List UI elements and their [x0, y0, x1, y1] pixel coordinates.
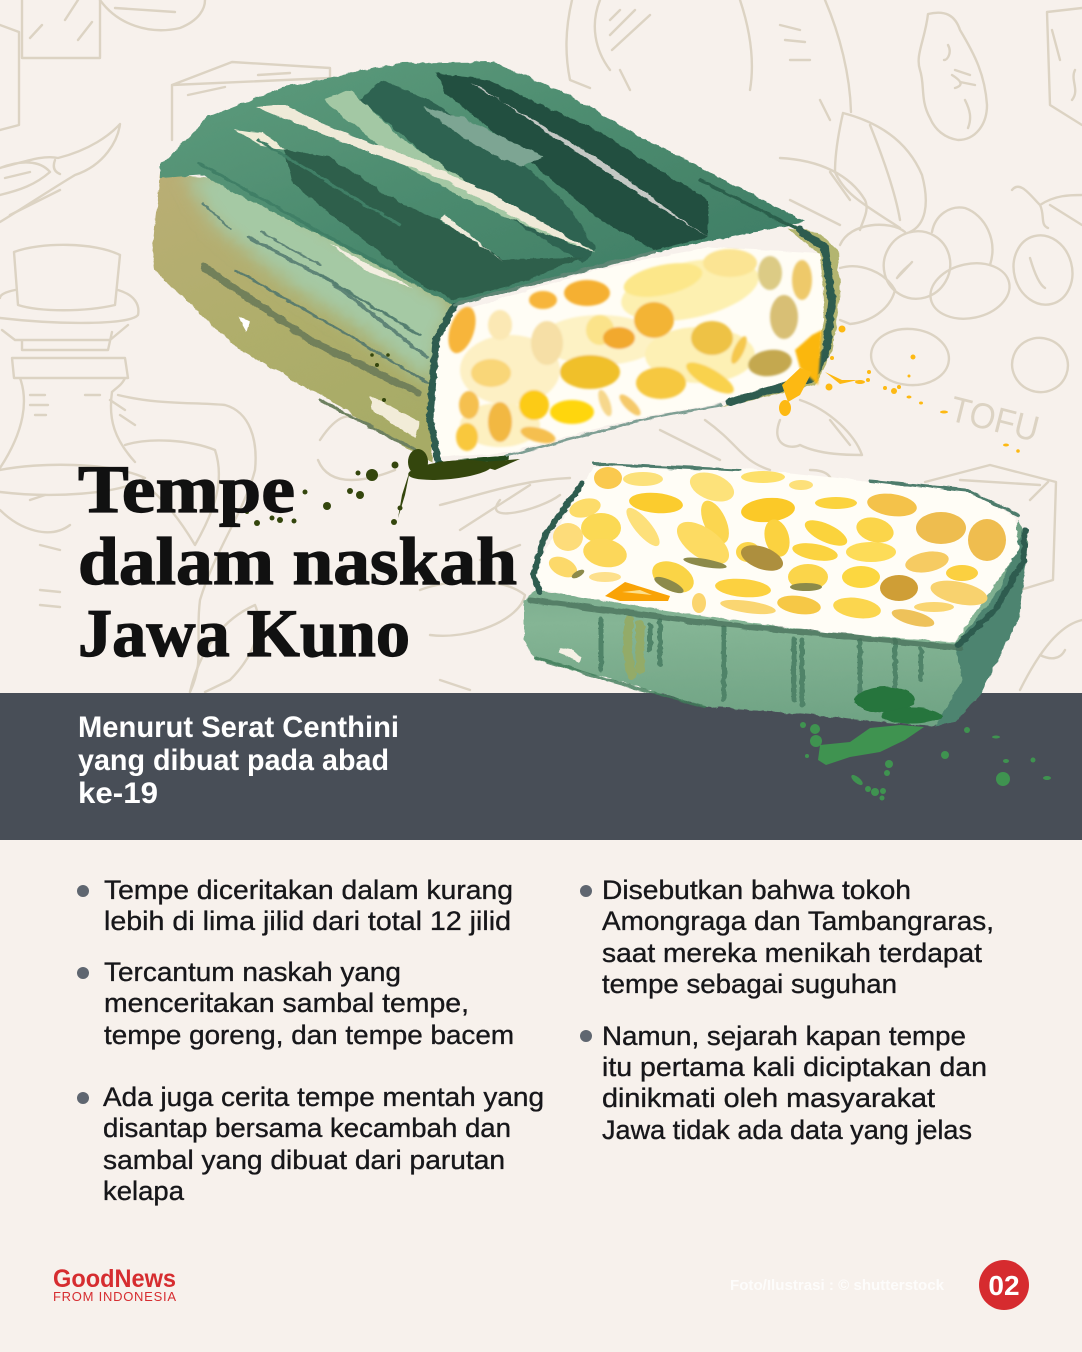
- label: TOFU: TOFU: [946, 388, 1043, 450]
- sketch: soybeans and leaves: [780, 113, 1082, 400]
- bullet 2: menceritakan sambal tempe,: [104, 988, 469, 1018]
- subtitle: [78, 711, 399, 810]
- title: Tempe: [78, 451, 295, 527]
- bullet 5: Jawa tidak ada data yang jelas: [602, 1115, 972, 1145]
- bullet 3: kelapa: [103, 1176, 185, 1206]
- dark green drip: [855, 687, 942, 724]
- cut face rim: [430, 230, 832, 464]
- leaf highlights and strokes: [199, 83, 800, 450]
- title: dalam naskah: [78, 523, 517, 599]
- subtitle: Menurut Serat Centhini: [78, 711, 399, 744]
- logo: GoodNews from Indonesia: GoodNews: [53, 1265, 176, 1293]
- title: Jawa Kuno: [78, 595, 410, 671]
- bullet 5: dinikmati oleh masyarakat: [602, 1083, 936, 1113]
- sketch: tofu block far right: [1047, 8, 1082, 125]
- sketch: oil jar with cork: [0, 245, 258, 692]
- logo: GoodNews from Indonesia: FROM INDONESIA: [53, 1289, 176, 1304]
- olive right rim: [720, 228, 840, 408]
- sketch: hand and beans lower centre: [318, 416, 720, 690]
- leaf side: [152, 62, 806, 463]
- bullet 4: [580, 875, 994, 999]
- dark green splatter: [245, 353, 520, 526]
- cut face: [433, 247, 824, 457]
- bullet 3: sambal yang dibuat dari parutan: [103, 1145, 505, 1175]
- sketch: nut top right: [919, 13, 987, 140]
- subtitle: ke-19: [78, 777, 158, 810]
- bullet 1: lebih di lima jilid dari total 12 jilid: [104, 906, 511, 936]
- left column: bullet points: [77, 875, 544, 1206]
- white top: [533, 467, 1019, 642]
- subtitle: yang dibuat pada abad: [78, 744, 389, 777]
- photo credit: Foto/Ilustrasi : © shutterstock: [730, 1277, 945, 1294]
- background line art: food sketches: [0, 0, 1082, 692]
- right column: bullet points: [580, 875, 994, 1145]
- bullet 1: Tempe diceritakan dalam kurang: [104, 875, 513, 905]
- green splatter on band: [800, 722, 1051, 800]
- page number badge: 02: [988, 1270, 1020, 1301]
- dark subtitle band: [0, 693, 1082, 840]
- bullet 2: Tercantum naskah yang: [104, 957, 401, 987]
- bullet 2: tempe goreng, dan tempe bacem: [104, 1020, 514, 1050]
- bullet 4: saat mereka menikah terdapat: [602, 938, 983, 968]
- bullet 3: [77, 1082, 544, 1206]
- sketch: right edge leaf: [1020, 620, 1082, 690]
- page number badge: [979, 1260, 1029, 1310]
- bullet 4: Disebutkan bahwa tokoh: [602, 875, 911, 905]
- bullet 3: Ada juga cerita tempe mentah yang: [103, 1082, 544, 1112]
- sketch: bread and leaf top centre: [566, 0, 851, 120]
- bullet 3: disantap bersama kecambah dan: [103, 1113, 511, 1143]
- vertical leaf streaks: [530, 600, 960, 707]
- sketch: tofu blocks top left: [0, 0, 330, 140]
- illustration: sliced tempe piece: [524, 464, 1051, 800]
- bullet 1: [77, 875, 513, 936]
- sketch: soybean pod: [0, 124, 120, 222]
- sketch: leaf below big tempe: [705, 400, 862, 490]
- bullet 5: itu pertama kali diciptakan dan: [602, 1052, 987, 1082]
- bullet 5: [580, 1021, 987, 1145]
- bullet 2: [77, 957, 514, 1050]
- title: [78, 451, 517, 671]
- tempe soybeans: [546, 467, 1006, 630]
- yellow splatter: [779, 326, 1020, 453]
- top rim: [533, 464, 1025, 645]
- bullet 4: Amongraga dan Tambangraras,: [602, 906, 994, 936]
- bullet 4: tempe sebagai suguhan: [602, 969, 897, 999]
- logo: GoodNews from Indonesia: [53, 1265, 176, 1304]
- illustration: large tempe wrapped in leaf: [152, 62, 1020, 526]
- bullet 5: Namun, sejarah kapan tempe: [602, 1021, 966, 1051]
- tempe soybeans: [443, 248, 822, 451]
- sketch: tofu block behind small tempe: [460, 465, 1056, 590]
- leaf side: [524, 520, 1027, 727]
